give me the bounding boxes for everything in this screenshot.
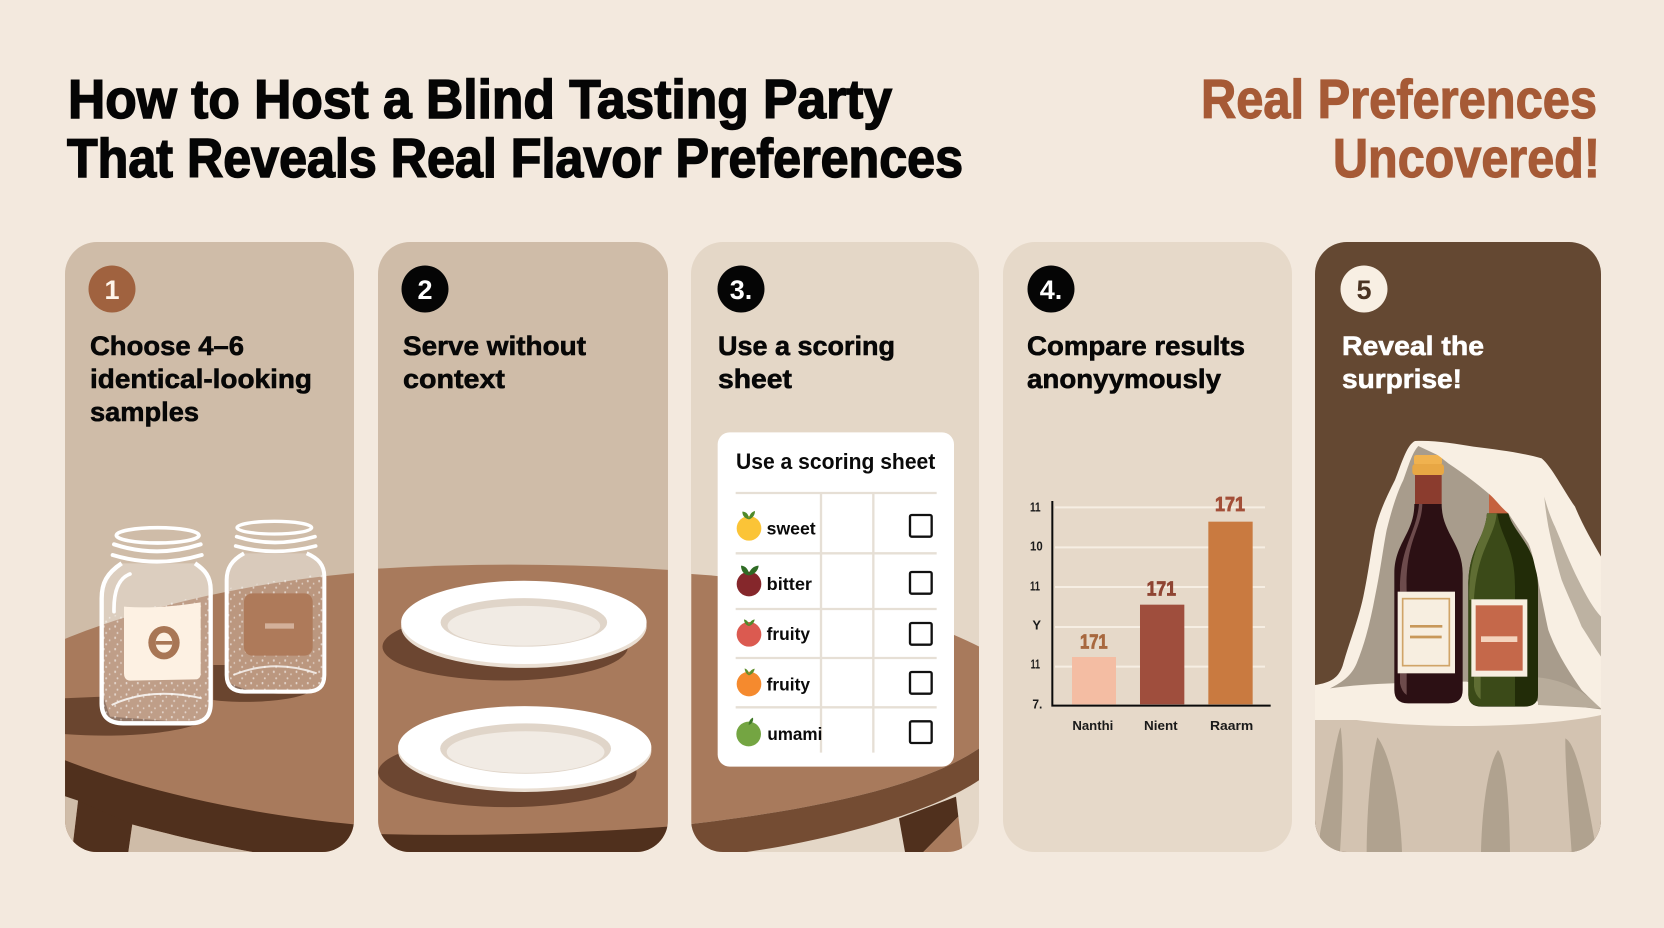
row: umami <box>736 718 932 746</box>
step 4 heading: anonyymously <box>1027 364 1221 394</box>
step number 2: 2 <box>417 275 433 305</box>
step 4 heading: Compare results <box>1027 331 1245 361</box>
y axis labels <box>1030 501 1043 712</box>
icon: lower plate <box>378 706 651 807</box>
row: fruity orange <box>737 668 932 696</box>
bar value labels: 171 <box>1147 578 1176 601</box>
x axis labels: Nanthi <box>1072 719 1113 733</box>
scoring sheet card <box>718 432 954 767</box>
skirt folds <box>1320 727 1597 852</box>
x axis labels: Nient <box>1144 719 1179 733</box>
row: sweet <box>737 511 932 541</box>
row: umami: umami <box>767 724 822 744</box>
step 1 heading: identical-looking <box>90 364 312 394</box>
row: bitter: bitter <box>767 574 812 594</box>
step number 1: 1 <box>104 275 120 305</box>
jar shadows <box>63 697 200 736</box>
y axis labels: 10 <box>1030 540 1043 554</box>
step 4 heading <box>1027 331 1245 394</box>
step number 5 <box>1340 266 1388 312</box>
illustration: table with plates <box>378 565 668 855</box>
step 2 heading: context <box>403 364 505 394</box>
y axis labels: 11 <box>1030 580 1040 594</box>
step number 1 <box>88 266 136 312</box>
bar value labels: 171 <box>1080 631 1108 654</box>
x axis labels: Raarm <box>1210 719 1253 733</box>
step 1 heading <box>90 331 312 427</box>
step 5 heading <box>1342 331 1484 394</box>
step 5 heading: surprise! <box>1342 364 1462 394</box>
icon: small jar <box>227 521 324 692</box>
sheet grid <box>736 493 937 753</box>
illustration: draped bottles on table <box>1313 441 1603 857</box>
row: sweet: sweet <box>767 518 816 538</box>
tagline <box>1201 68 1600 189</box>
illustration: table <box>691 574 979 852</box>
panel: step 3 scoring sheet <box>691 242 979 852</box>
y axis labels: 11 <box>1030 501 1041 515</box>
step number 3: 3. <box>730 275 752 305</box>
step number 4: 4. <box>1040 275 1062 305</box>
right table shadow <box>1538 677 1601 708</box>
illustration: table with jars <box>63 521 356 855</box>
step number 4 <box>1028 266 1074 312</box>
panel: step 5 reveal <box>1313 242 1603 857</box>
panel: step 4 compare results <box>1003 242 1292 852</box>
step 3 heading <box>718 331 895 394</box>
panel: step 1 choose samples <box>63 242 356 855</box>
y axis labels: 7. <box>1032 698 1042 712</box>
sheet title: Use a scoring sheet <box>736 449 936 474</box>
icon: upper plate <box>382 581 647 680</box>
icon: red wine bottle <box>1394 455 1463 703</box>
tagline: Real Preferences <box>1201 68 1597 130</box>
step 3 heading: sheet <box>718 364 792 394</box>
cloth fold <box>1544 497 1601 657</box>
x axis labels <box>1072 719 1253 733</box>
tagline: Uncovered! <box>1333 127 1600 189</box>
panel: step 2 serve without context <box>378 242 668 855</box>
icon: green wine bottle <box>1468 493 1538 707</box>
title: How to Host a Blind Tasting Party <box>68 68 892 130</box>
bar value labels: 171 <box>1215 493 1245 516</box>
step number 2 <box>402 266 448 312</box>
bar value labels <box>1080 493 1245 654</box>
title <box>67 68 963 189</box>
row: bitter <box>737 566 932 596</box>
table top <box>1358 682 1601 726</box>
step 2 heading: Serve without <box>403 331 586 361</box>
bars <box>1072 522 1253 704</box>
y axis labels: 11 <box>1031 658 1040 672</box>
bar chart <box>1030 493 1271 733</box>
step 2 heading <box>403 331 586 394</box>
cloth back <box>1315 441 1438 720</box>
title: That Reveals Real Flavor Preferences <box>67 127 963 189</box>
step 1 heading: samples <box>90 397 199 427</box>
step number 3 <box>718 266 764 312</box>
step 3 heading: Use a scoring <box>718 331 895 361</box>
row: fruity red: fruity <box>767 624 810 644</box>
row: fruity red <box>737 619 932 647</box>
icon: large jar <box>102 528 211 723</box>
cloth drape front <box>1415 441 1601 708</box>
step 5 heading: Reveal the <box>1342 331 1484 361</box>
step 1 heading: Choose 4–6 <box>90 331 244 361</box>
step number 5: 5 <box>1356 275 1372 305</box>
y axis labels: Y <box>1032 618 1042 632</box>
table skirt <box>1313 700 1603 857</box>
row: fruity orange: fruity <box>767 675 810 695</box>
